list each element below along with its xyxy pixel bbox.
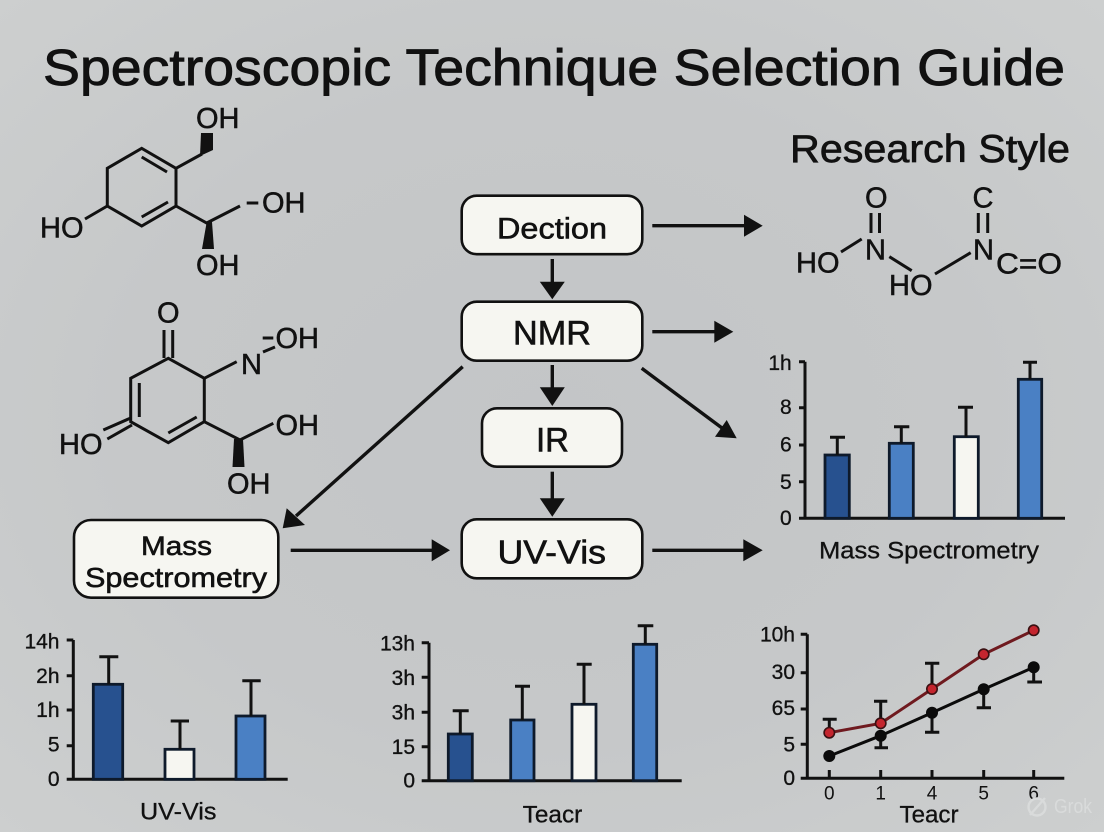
- molecule: middle left structure: [59, 298, 319, 500]
- y-axis labels: 2h: [36, 665, 60, 688]
- y-axis labels: 1h: [36, 699, 60, 722]
- arrow: NMR to right: [652, 321, 733, 343]
- error bars: [830, 362, 1037, 455]
- bars: [93, 684, 265, 779]
- y-axis labels: 65: [772, 697, 795, 720]
- molecule: top left structure: OH: [262, 188, 306, 220]
- molecule: top right structure: HO: [889, 270, 932, 302]
- bar chart: Teacr: [380, 626, 682, 829]
- arrow: NMR to bar chart: [642, 368, 737, 438]
- flowchart box: NMR: NMR: [513, 314, 591, 352]
- arrow: Dection to right: [652, 215, 763, 237]
- molecule: top right structure: HO: [796, 248, 840, 280]
- x-axis labels: [824, 783, 1039, 804]
- y-axis labels: 1h: [768, 352, 792, 375]
- flowchart box: Mass Spectrometry: Spectrometry: [85, 562, 267, 593]
- bars: [448, 644, 657, 781]
- x-axis labels: 0: [824, 783, 835, 804]
- flowchart box: Mass Spectrometry: Mass: [141, 531, 212, 561]
- axes: [801, 634, 1064, 778]
- flowchart box: Mass Spectrometry: [74, 520, 278, 598]
- molecule: top right structure: C=O: [996, 248, 1062, 280]
- bars: [825, 379, 1042, 518]
- molecule: top right structure: C: [972, 183, 993, 215]
- flowchart box: Dection: Dection: [497, 212, 607, 245]
- y-axis labels: 0: [403, 770, 415, 793]
- molecule: top right structure: [796, 183, 1062, 302]
- line chart: Teacr: [760, 624, 1064, 829]
- molecule: top left structure: OH: [196, 250, 240, 282]
- molecule: middle left structure: OH: [227, 468, 270, 500]
- flowchart box: UV-Vis: UV-Vis: [498, 533, 606, 570]
- y-axis labels: 3h: [392, 667, 415, 690]
- watermark: Grok: [1028, 796, 1093, 818]
- arrow: NMR to Mass Spectrometry: [283, 367, 463, 528]
- arrow: Dection to NMR: [540, 259, 565, 299]
- arrow: Mass Spectrometry to UV-Vis: [291, 539, 450, 561]
- axes: [799, 362, 1065, 518]
- y-axis labels: 6: [780, 434, 792, 457]
- y-axis labels: 0: [780, 507, 792, 530]
- y-axis labels: 13h: [380, 633, 415, 656]
- molecule: top right structure: N: [865, 234, 886, 266]
- flowchart box: Dection: [462, 196, 642, 254]
- flowchart box: IR: IR: [536, 422, 569, 460]
- molecule: middle left structure: HO: [59, 429, 102, 461]
- y-axis labels: 5: [780, 471, 792, 494]
- flowchart box: NMR: [462, 302, 642, 361]
- error bars: [99, 657, 261, 749]
- y-axis labels: [24, 630, 60, 791]
- molecule: top left structure: [40, 103, 306, 282]
- arrow: UV-Vis to right: [652, 539, 763, 561]
- arrow: IR to UV-Vis: [540, 472, 565, 517]
- y-axis labels: 3h: [392, 701, 415, 724]
- y-axis labels: 10h: [760, 624, 795, 647]
- watermark: Grok: Grok: [1054, 796, 1093, 818]
- chart caption: Teacr: [900, 802, 959, 829]
- chart caption: Teacr: [523, 802, 582, 829]
- chart caption: UV-Vis: [140, 798, 216, 825]
- black data series: [823, 661, 1040, 762]
- y-axis labels: [760, 624, 795, 790]
- y-axis labels: 5: [48, 734, 60, 757]
- heading: research style: Research Style: [790, 128, 1070, 171]
- bar chart: Mass Spectrometry: [768, 352, 1065, 564]
- molecule: middle left structure: N: [241, 349, 262, 381]
- molecule: middle left structure: O: [157, 298, 180, 330]
- y-axis labels: 14h: [24, 630, 60, 653]
- title: Spectroscopic Technique Selection Guide: [43, 39, 1065, 96]
- error bars: [823, 663, 1042, 748]
- molecule: top right structure: O: [865, 183, 888, 215]
- y-axis labels: 0: [783, 767, 795, 790]
- bar chart: UV-Vis: [24, 630, 288, 825]
- axes: [422, 643, 682, 781]
- x-axis labels: 6: [1028, 783, 1039, 804]
- molecule: top left structure: HO: [40, 213, 84, 245]
- chart caption: Mass Spectrometry: [819, 537, 1039, 564]
- molecule: middle left structure: OH: [276, 323, 319, 355]
- y-axis labels: [380, 633, 415, 793]
- molecule: top left structure: OH: [196, 103, 240, 135]
- arrow: NMR to IR: [540, 365, 565, 406]
- flowchart box: UV-Vis: [462, 519, 642, 578]
- error bars: [453, 626, 653, 734]
- flowchart box: IR: [482, 408, 622, 467]
- x-axis labels: 1: [875, 783, 886, 804]
- y-axis labels: [768, 352, 792, 530]
- y-axis labels: 5: [783, 734, 795, 757]
- molecule: top right structure: N: [973, 234, 994, 266]
- axes: [67, 640, 288, 779]
- y-axis labels: 0: [48, 768, 60, 791]
- y-axis labels: 15: [392, 736, 415, 759]
- y-axis labels: 30: [772, 661, 795, 684]
- x-axis labels: 5: [978, 783, 989, 804]
- y-axis labels: 8: [780, 396, 792, 419]
- x-axis labels: 4: [927, 783, 938, 804]
- red data series: [824, 625, 1039, 738]
- molecule: middle left structure: OH: [276, 410, 319, 442]
